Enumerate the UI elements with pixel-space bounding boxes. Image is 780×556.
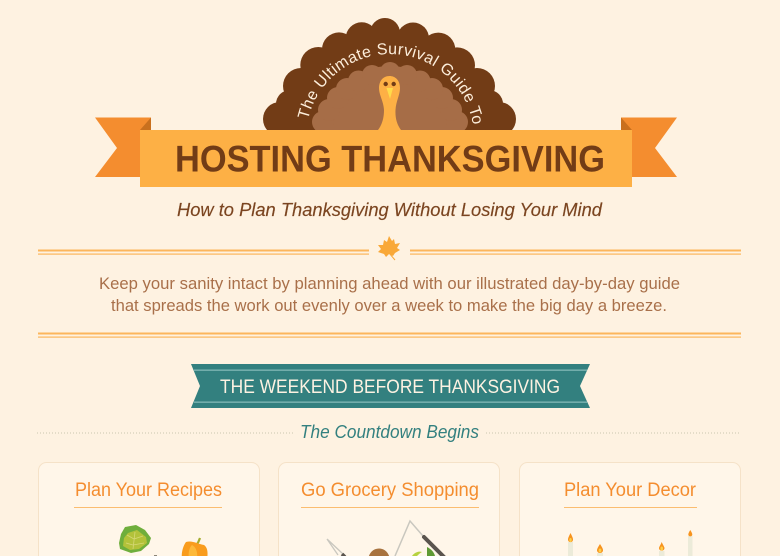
icon: bell pepper xyxy=(182,538,208,556)
intro text: Keep your sanity intact by planning ahead with our illustrated day-by-day guide xyxy=(99,275,680,293)
title banner xyxy=(140,130,632,187)
title: HOSTING THANKSGIVING xyxy=(175,138,605,180)
panel: plan your recipes xyxy=(38,462,260,556)
panel: go grocery shopping xyxy=(278,462,500,556)
intro text xyxy=(99,275,680,315)
subtitle: How to Plan Thanksgiving Without Losing Your Mind xyxy=(177,199,603,220)
icon: turkey xyxy=(263,18,516,136)
icon: cabbage xyxy=(119,525,151,553)
turkey neck and head xyxy=(378,76,401,130)
section banner xyxy=(191,364,590,408)
icon: maple leaf xyxy=(378,236,400,260)
icon: grocery bag xyxy=(327,521,447,556)
card heading: Plan Your Recipes xyxy=(75,480,222,501)
intro text: that spreads the work out evenly over a week to make the big day a breeze. xyxy=(111,297,667,315)
icon: candles xyxy=(568,530,692,556)
section subheading: The Countdown Begins xyxy=(300,422,479,442)
panel: plan your decor xyxy=(520,462,740,556)
ribbon tail: right xyxy=(621,118,677,177)
card heading: Plan Your Decor xyxy=(564,480,697,501)
ribbon tail: left xyxy=(95,118,151,177)
curved turkey caption: The Ultimate Survival Guide To xyxy=(297,43,482,124)
section heading: THE WEEKEND BEFORE THANKSGIVING xyxy=(220,376,560,398)
card heading: Go Grocery Shopping xyxy=(301,480,479,501)
